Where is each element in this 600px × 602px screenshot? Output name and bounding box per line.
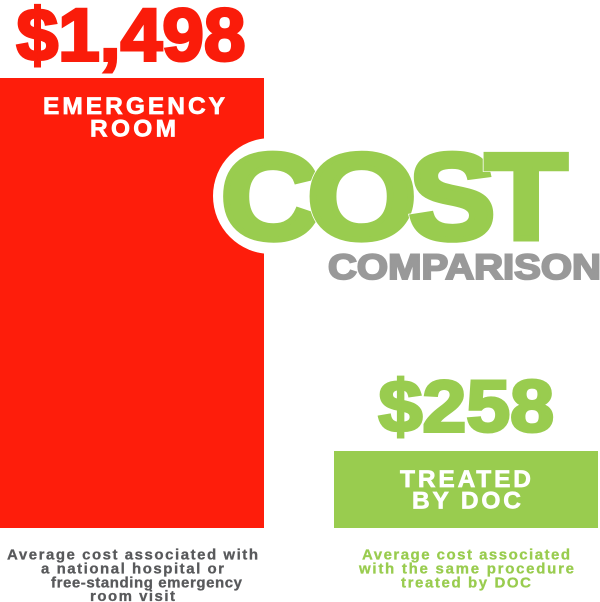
title word: cost: [221, 128, 567, 265]
caption: treated by doc: with the same procedure: [358, 560, 574, 577]
bar: emergency room: [0, 78, 264, 528]
title word: cost: S: [409, 128, 495, 265]
bar: treated by doc: [334, 451, 598, 528]
caption: emergency room: a national hospital or: [41, 560, 224, 577]
caption: emergency room: free-standing emergency: [51, 574, 243, 591]
title word: comparison: COMPARISON: [328, 248, 600, 287]
title word: cost: C: [221, 129, 319, 265]
bar label: treated by doc: [400, 466, 531, 514]
white halo behind title: [213, 138, 329, 254]
title word: cost: O: [307, 129, 417, 265]
price: treated by doc: $258: [378, 366, 554, 448]
title word: cost: S: [409, 128, 495, 265]
caption: emergency room: Average cost associated with: [7, 546, 258, 563]
bar label: emergency room: ROOM: [90, 116, 176, 143]
caption: treated by doc: [358, 546, 574, 591]
bar label: treated by doc: TREATED: [400, 466, 531, 493]
bar label: emergency room: [43, 93, 225, 143]
title word: cost: T: [485, 129, 567, 265]
bar label: treated by doc: BY DOC: [412, 488, 521, 514]
bar label: emergency room: EMERGENCY: [43, 93, 225, 120]
title word: cost: O: [307, 129, 417, 265]
caption: treated by doc: treated by DOC: [401, 574, 531, 591]
title word: cost: T: [485, 129, 567, 265]
caption: treated by doc: Average cost associated: [362, 546, 570, 563]
caption: emergency room: [7, 546, 258, 602]
